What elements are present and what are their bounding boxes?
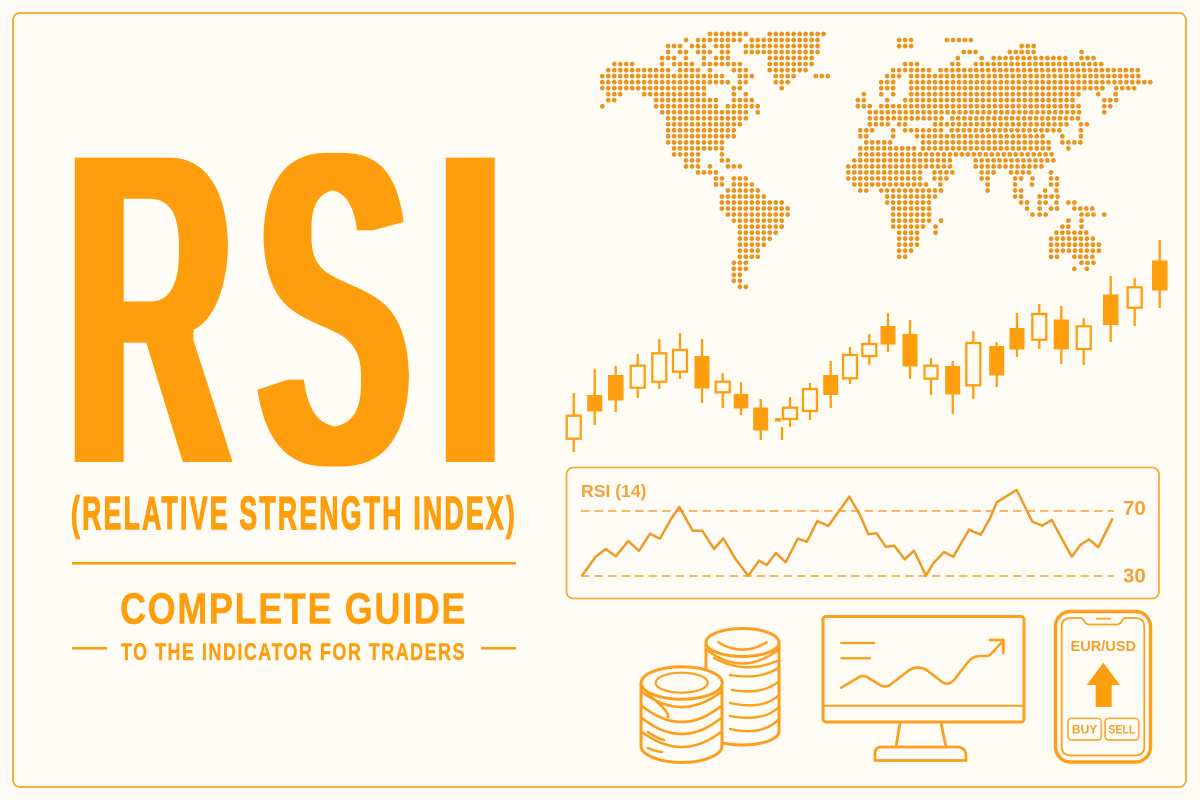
phone screen with notch bbox=[1062, 618, 1144, 756]
panel: RSI (14) oscillator bbox=[566, 468, 1159, 598]
title: RSI: RSI bbox=[68, 53, 502, 564]
icon: smartphone bbox=[1056, 612, 1150, 762]
front coin stack bbox=[641, 667, 722, 762]
level 70: 70 bbox=[1123, 497, 1146, 520]
sell button: SELL bbox=[1108, 723, 1135, 737]
buy button bbox=[1068, 718, 1101, 740]
screen trend line bbox=[841, 641, 1003, 688]
panel label: RSI (14) bbox=[581, 481, 647, 501]
heading: complete guide: COMPLETE GUIDE bbox=[120, 584, 467, 634]
monitor stand bbox=[875, 723, 966, 760]
trend arrow head bbox=[990, 640, 1003, 653]
sell button bbox=[1105, 718, 1139, 740]
screen divider bbox=[823, 705, 1024, 707]
hollow candles bbox=[567, 287, 1142, 439]
dotted world map bbox=[602, 34, 1150, 287]
screen text lines bbox=[841, 643, 874, 658]
divider bbox=[72, 562, 516, 565]
monitor screen bbox=[823, 616, 1024, 722]
buy button: BUY bbox=[1072, 723, 1097, 737]
threshold lines bbox=[581, 511, 1114, 576]
map: Eurasia, Africa and Australia bbox=[848, 40, 1150, 269]
filled candles bbox=[587, 260, 1168, 430]
panel frame bbox=[566, 468, 1159, 598]
subtitle: relative strength index: (RELATIVE STRENGTH INDEX) bbox=[71, 487, 517, 539]
tagline with side dashes: TO THE INDICATOR FOR TRADERS bbox=[121, 639, 466, 666]
speaker bbox=[1096, 618, 1111, 620]
level 30: 30 bbox=[1123, 564, 1146, 588]
icon: up arrow bbox=[1087, 663, 1120, 707]
map: Americas and Greenland bbox=[602, 34, 828, 287]
icon: monitor with chart bbox=[823, 616, 1024, 760]
back coin stack bbox=[706, 628, 779, 745]
pair label: EUR/USD bbox=[1070, 639, 1136, 655]
candlestick chart bbox=[567, 240, 1168, 452]
candlestick wicks bbox=[574, 240, 1160, 452]
panel: title block bbox=[68, 53, 517, 666]
phone body bbox=[1056, 612, 1150, 762]
RSI line bbox=[582, 490, 1113, 576]
icon: coin stacks bbox=[641, 628, 779, 762]
